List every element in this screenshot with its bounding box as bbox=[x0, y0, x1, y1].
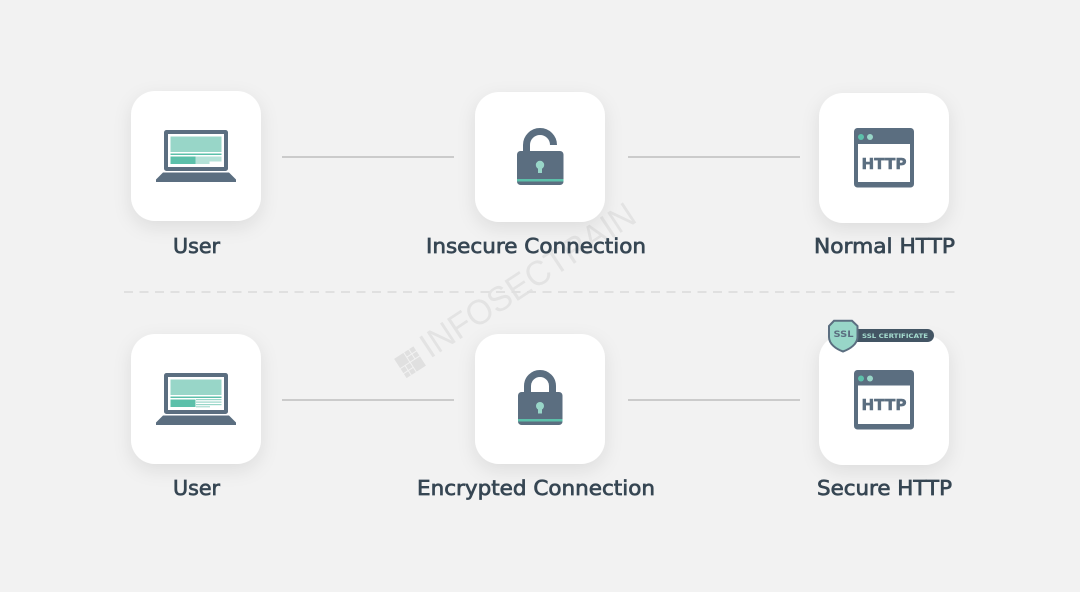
label: user, top row: User bbox=[173, 234, 221, 258]
label: encrypted connection: Encrypted Connection bbox=[417, 476, 655, 500]
panel: user, top row bbox=[131, 91, 261, 221]
watermark: INFOSECTRAIN bbox=[413, 195, 643, 366]
icon: open padlock bbox=[517, 132, 564, 185]
connector: user to insecure connection bbox=[282, 156, 454, 158]
label: normal HTTP: Normal HTTP bbox=[814, 234, 955, 258]
label: insecure connection: Insecure Connection bbox=[426, 234, 646, 258]
divider bbox=[124, 291, 957, 293]
icon: browser window: HTTP bbox=[862, 396, 907, 414]
connector: insecure connection to normal HTTP bbox=[628, 156, 800, 158]
connector: encrypted connection to secure HTTP bbox=[628, 399, 800, 401]
badge: SSL certificate: SSL CERTIFICATE bbox=[862, 332, 928, 340]
icon: browser window bbox=[854, 370, 914, 430]
panel: normal HTTP bbox=[819, 93, 949, 223]
panel: insecure connection bbox=[475, 92, 605, 222]
badge: SSL certificate bbox=[829, 321, 934, 352]
icon: browser window: HTTP bbox=[862, 155, 907, 173]
label: user, bottom row: User bbox=[173, 476, 221, 500]
connector: user to encrypted connection bbox=[282, 399, 454, 401]
panel: user, bottom row bbox=[131, 334, 261, 464]
label: secure HTTP: Secure HTTP bbox=[817, 476, 952, 500]
icon: laptop bbox=[156, 373, 236, 425]
panel: encrypted connection bbox=[475, 334, 605, 464]
icon: laptop bbox=[156, 130, 236, 182]
badge: SSL certificate: SSL bbox=[834, 330, 854, 340]
icon: closed padlock bbox=[518, 374, 562, 425]
panel: secure HTTP bbox=[819, 321, 949, 465]
